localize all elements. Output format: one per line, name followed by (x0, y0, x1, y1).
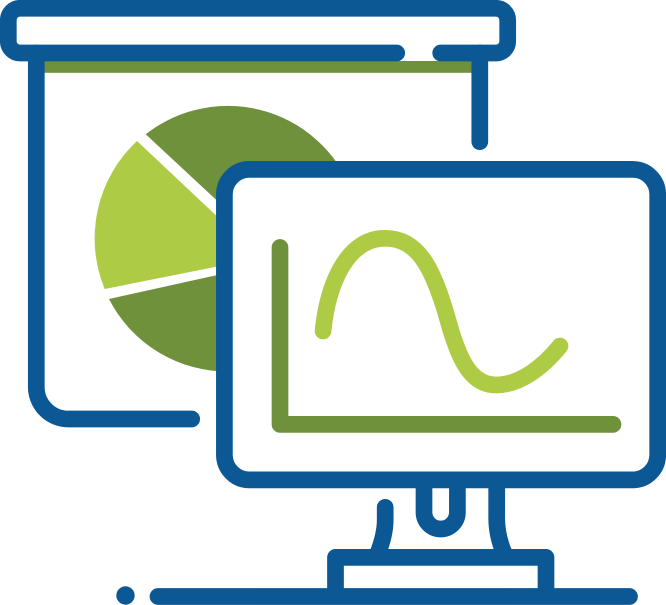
screen left edge and bottom (36, 53, 192, 419)
monitor neck inner U (424, 480, 457, 529)
icon: projector screen (8, 8, 508, 419)
monitor frame (224, 169, 658, 480)
pie slice: light green (95, 141, 240, 289)
monitor neck left (378, 507, 385, 553)
icon: monitor (158, 169, 658, 596)
pie chart (95, 106, 355, 372)
screen roller bar (8, 8, 508, 53)
ground line (158, 588, 630, 605)
line chart on monitor (280, 238, 613, 424)
screen right edge (471, 53, 488, 142)
chart curve (323, 238, 560, 385)
monitor base (336, 557, 546, 592)
monitor neck right (497, 480, 504, 553)
ground dot (116, 586, 135, 605)
screen green strip (44, 61, 472, 73)
chart axes (280, 248, 613, 424)
pie slice: upper dark green (146, 106, 355, 222)
pie slice: lower dark green (109, 270, 240, 372)
